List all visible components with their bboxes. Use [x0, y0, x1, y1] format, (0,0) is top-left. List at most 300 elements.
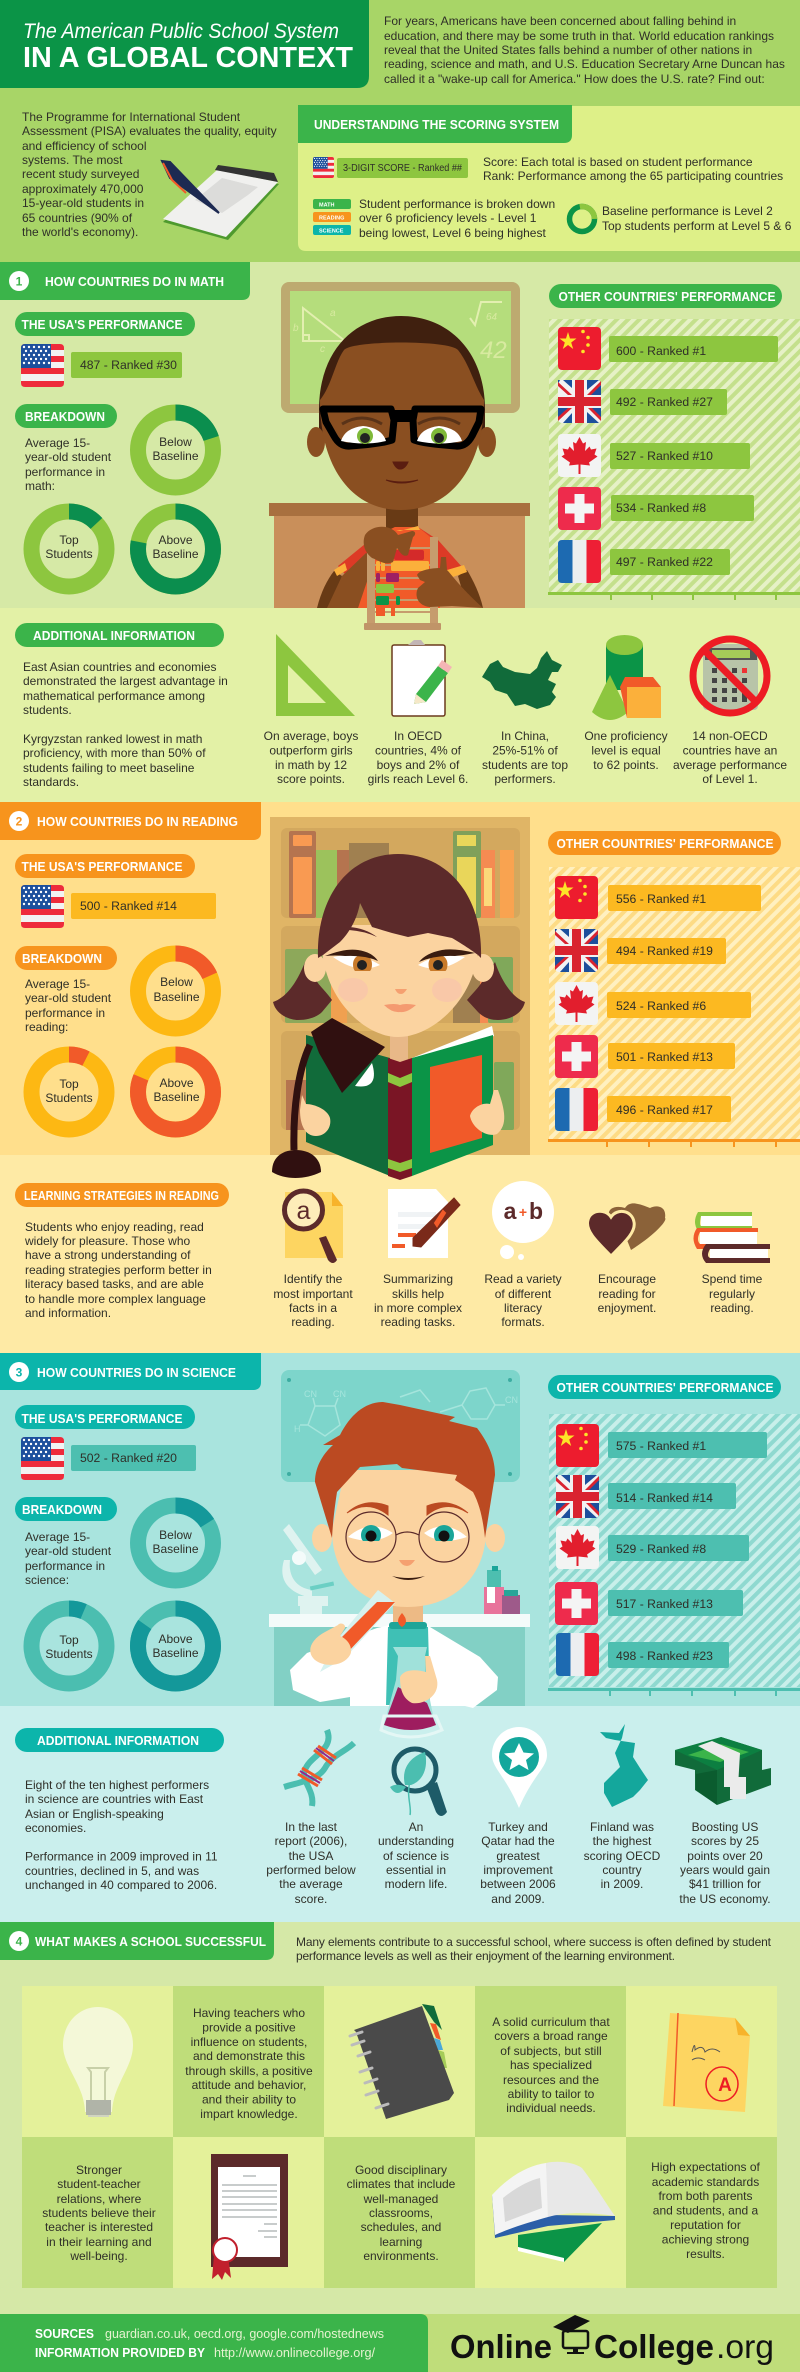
- icon: notepad and pen: [162, 161, 279, 240]
- caption: OECD: girls reach Level 6.: [368, 772, 468, 786]
- math captions: [264, 729, 787, 786]
- caption: OECD: In OECD: [394, 729, 442, 743]
- heading tab: how countries do in science: HOW COUNTRIES DO IN SCIENCE: [37, 1365, 236, 1380]
- illustration: girl reading: [272, 854, 525, 1180]
- text: discipline: schedules, and: [361, 2220, 441, 2234]
- donut: below baseline: Below: [160, 975, 193, 989]
- text: discipline: learning: [380, 2235, 422, 2249]
- book: [306, 1026, 494, 1180]
- caption: China: students are top: [482, 758, 568, 772]
- caption: 2006 report: the USA: [289, 1849, 333, 1863]
- caption: Turkey and Qatar: and 2009.: [491, 1892, 545, 1906]
- text: teachers: and their ability to: [202, 2092, 296, 2106]
- math additional text: standards.: [23, 775, 79, 789]
- subject colour key: SCIENCE: [319, 228, 344, 234]
- pill: other countries' performance: [548, 1375, 781, 1399]
- caption: boosting scores: the US economy.: [679, 1892, 771, 1906]
- science additional text: countries, declined in 5, and was: [25, 1864, 199, 1878]
- pill: breakdown: BREAKDOWN: [25, 409, 105, 424]
- caption: enjoyment: Encourage: [598, 1272, 656, 1286]
- donut: below baseline: Baseline: [152, 1542, 199, 1556]
- panel: science additional background: [0, 1706, 800, 1922]
- pill: learning strategies: [15, 1183, 229, 1207]
- science captions: [266, 1820, 771, 1906]
- caption: identify facts: reading.: [291, 1315, 335, 1329]
- caption: summarizing: Summarizing: [383, 1272, 453, 1286]
- illustration: science board: H: [294, 1424, 300, 1434]
- pill: other countries' performance: OTHER COUNTRIES' PERFORMANCE: [558, 289, 776, 304]
- icon: monitor with mortarboard: [553, 2315, 590, 2354]
- science additional text: in science are countries with East: [25, 1792, 204, 1806]
- PISA description: recent study surveyed: [22, 167, 139, 181]
- donut: below baseline: [138, 1506, 213, 1580]
- caption: variety: Read a variety: [484, 1272, 562, 1286]
- UK row: 494 - Ranked #19: [616, 944, 713, 958]
- text: expectations: achieving strong: [662, 2232, 749, 2246]
- illustration: science board: [281, 1370, 520, 1482]
- USA score bar: 500 - Ranked #14: [80, 899, 177, 913]
- math additional text: Kyrgyzstan ranked lowest in math: [23, 732, 202, 746]
- pill: breakdown: BREAKDOWN: [22, 1502, 102, 1517]
- text: teachers: impart knowledge.: [200, 2107, 298, 2121]
- PISA description: and efficiency of school: [22, 139, 147, 153]
- illustration: chalkboard: 42: [480, 337, 507, 364]
- caption: understanding science: understanding: [378, 1834, 454, 1848]
- reading strategies text: to handle more complex language: [25, 1292, 206, 1306]
- caption: boosting scores: Boosting US: [692, 1820, 758, 1834]
- China row: [555, 876, 761, 919]
- text: expectations: results.: [686, 2247, 725, 2261]
- heading tab: what makes a school successful: 4: [16, 1934, 23, 1948]
- caption: non-OECD: 14 non-OECD: [692, 729, 768, 743]
- France row: 498 - Ranked #23: [616, 1649, 713, 1663]
- strategy captions: [273, 1272, 763, 1329]
- icon: a plus b thought bubble: +: [519, 1204, 527, 1220]
- caption: summarizing: skills help: [392, 1287, 444, 1301]
- donut: below baseline: [138, 954, 213, 1028]
- breakdown text: performance in: [25, 1006, 105, 1020]
- title line 1: The American Public School System: [23, 20, 339, 43]
- text: expectations: reputation for: [670, 2218, 741, 2232]
- sources line: SOURCES: [35, 2326, 94, 2341]
- sources line: guardian.co.uk, oecd.org, google.com/hostednews: [105, 2326, 384, 2341]
- icon: clipboard and pencil: [392, 640, 452, 716]
- USA score bar: [71, 1445, 196, 1471]
- caption: identify facts: most important: [273, 1287, 353, 1301]
- text: discipline: climates that include: [347, 2177, 456, 2191]
- donut: above baseline: Baseline: [152, 547, 199, 561]
- flag: USA: [21, 344, 64, 387]
- heading tab: what makes a school successful: WHAT MAKES A SCHOOL SUCCESSFUL: [35, 1934, 266, 1949]
- flag: USA: [21, 1437, 64, 1480]
- heading tab: how countries do in reading: HOW COUNTRIES DO IN READING: [37, 814, 238, 829]
- UK row: 492 - Ranked #27: [616, 395, 713, 409]
- panel: section 3 science: [0, 1353, 800, 1706]
- test tube: [310, 1590, 406, 1672]
- donut: above baseline: Above: [159, 1076, 194, 1090]
- heading tab: how countries do in science: [0, 1353, 261, 1390]
- caption: boosting scores: $41 trillion for: [689, 1877, 761, 1891]
- caption: Turkey and Qatar: improvement: [483, 1863, 553, 1877]
- pill: the USA's performance: [15, 312, 195, 336]
- pill: breakdown: BREAKDOWN: [22, 951, 102, 966]
- icon: light bulb: [63, 2007, 133, 2117]
- caption: enjoyment: reading for: [598, 1287, 656, 1301]
- caption: summarizing: reading tasks.: [381, 1315, 455, 1329]
- China row: [556, 1424, 767, 1467]
- text: curriculum: of subjects, but still: [500, 2044, 602, 2058]
- Canada row: [556, 1526, 749, 1569]
- pill: other countries' performance: OTHER COUNTRIES' PERFORMANCE: [556, 1380, 774, 1395]
- panel: footer logo background: [420, 2314, 800, 2372]
- panel: other countries bar chart: [548, 319, 800, 600]
- caption: OECD: countries, 4% of: [375, 744, 462, 758]
- PISA description: 15-year-old students in: [22, 196, 144, 210]
- logo: OnlineCollege.org: Online: [450, 2328, 552, 2365]
- text: discipline: classrooms,: [369, 2206, 433, 2220]
- information provided by line: http://www.onlinecollege.org/: [214, 2345, 375, 2360]
- donut: top students: [32, 1054, 106, 1130]
- subject colour key: READING: [319, 216, 344, 222]
- text: curriculum: individual needs.: [506, 2101, 596, 2115]
- UK row: [555, 929, 726, 972]
- breakdown text: Average 15-: [25, 1530, 90, 1544]
- caption: understanding science: of science is: [383, 1849, 449, 1863]
- Switzerland row: [558, 487, 754, 530]
- section 4 intro: Many elements contribute to a successful school, where success is often defined by student: [296, 1935, 772, 1949]
- text: relations: student-teacher: [57, 2177, 141, 2191]
- pill: breakdown: [15, 1497, 117, 1521]
- caption: Finland: the highest: [593, 1834, 652, 1848]
- donut: above baseline: Baseline: [153, 1090, 200, 1104]
- caption: Finland: in 2009.: [601, 1877, 643, 1891]
- PISA description: the world's economy).: [22, 225, 138, 239]
- caption: understanding science: modern life.: [385, 1877, 447, 1891]
- donut: below baseline: Below: [159, 435, 192, 449]
- donut: top students: [32, 512, 106, 586]
- donut key: [568, 205, 596, 233]
- panel: understanding the scoring system: [298, 105, 800, 251]
- heading tab: how countries do in reading: [0, 802, 261, 840]
- breakdown text: Average 15-: [25, 977, 90, 991]
- Switzerland row: 517 - Ranked #13: [616, 1597, 713, 1611]
- China row: [558, 327, 778, 370]
- illustration: chalkboard: c: [320, 344, 325, 355]
- Canada row: 527 - Ranked #10: [616, 449, 713, 463]
- icon: graded A+ paper: A: [718, 2075, 732, 2096]
- caption: variety: formats.: [501, 1315, 545, 1329]
- panel: other countries bar chart: [548, 1414, 800, 1696]
- text: teachers: attitude and behavior,: [192, 2078, 306, 2092]
- icon: crossed-out calculator: [693, 639, 767, 713]
- donut: top students: Students: [45, 1091, 93, 1105]
- science additional text: unchanged in 40 compared to 2006.: [25, 1878, 217, 1892]
- illustration: science board: CN: [304, 1389, 317, 1399]
- icon: DNA helix: [284, 1730, 354, 1806]
- icon: magnifier on paper: a: [297, 1197, 311, 1225]
- caption: OECD: boys and 2% of: [377, 758, 460, 772]
- pill: the USA's performance: [15, 1405, 195, 1429]
- small US flag: [313, 157, 334, 178]
- scoring heading tab: [298, 105, 572, 143]
- text: relations: teacher is interested: [45, 2220, 153, 2234]
- pill: the USA's performance: THE USA'S PERFORMANCE: [22, 317, 183, 332]
- pill: additional information: [15, 1728, 224, 1752]
- text: teachers: through skills, a positive: [185, 2064, 313, 2078]
- text: curriculum: A solid curriculum that: [492, 2015, 610, 2029]
- icon: open book on closed book: [492, 2162, 615, 2262]
- text: teachers: provide a positive: [202, 2020, 296, 2034]
- breakdown text: math:: [25, 479, 55, 493]
- intro text: reveal that the United States falls behind a number of other nations in: [384, 43, 752, 57]
- pill: the USA's performance: THE USA'S PERFORMANCE: [22, 859, 183, 874]
- intro text: reading, science and math, and U.S. Education Secretary Arne Duncan has: [384, 57, 785, 71]
- icon: magnifier on paper: [284, 1191, 343, 1263]
- score legend bar: 3-DIGIT SCORE - Ranked ##: [343, 163, 462, 174]
- intro text: For years, Americans have been concerned about falling behind in: [384, 14, 736, 28]
- reading strategies text: widely for pleasure. Those who: [24, 1234, 191, 1248]
- pill: additional information: [15, 623, 224, 647]
- proficiency explanation: being lowest, Level 6 being highest: [359, 226, 546, 240]
- icon: China map: [482, 651, 562, 709]
- panel: section 4 what makes a school successful: [0, 1922, 800, 2372]
- caption: summarizing: in more complex: [374, 1301, 462, 1315]
- icon: set square: [276, 634, 355, 716]
- caption: Finland: scoring OECD: [584, 1849, 661, 1863]
- math additional text: proficiency, with more than 50% of: [23, 746, 206, 760]
- heading tab: how countries do in math: 1: [16, 274, 23, 288]
- donut: below baseline: [138, 412, 213, 488]
- donut: above baseline: Above: [158, 1632, 193, 1646]
- caption: Turkey and Qatar: Qatar had the: [481, 1834, 555, 1848]
- proficiency explanation: Student performance is broken down: [359, 197, 555, 211]
- math additional text: mathematical performance among: [23, 689, 205, 703]
- text: expectations: from both parents: [658, 2189, 753, 2203]
- caption: proficiency: to 62 points.: [593, 758, 659, 772]
- Switzerland row: 534 - Ranked #8: [616, 501, 706, 515]
- text: relations: relations, where: [57, 2192, 142, 2206]
- icon: framed certificate: [211, 2154, 288, 2280]
- USA score bar: [71, 893, 216, 919]
- Switzerland row: [555, 1582, 743, 1625]
- caption: boys outperform: score points.: [277, 772, 345, 786]
- scoring heading text: UNDERSTANDING THE SCORING SYSTEM: [314, 117, 559, 132]
- math additional text: students failing to meet baseline: [23, 761, 195, 775]
- France row: 496 - Ranked #17: [616, 1103, 713, 1117]
- text: curriculum: resources and the: [503, 2073, 599, 2087]
- flag: USA: [21, 885, 64, 928]
- heading tab: how countries do in science: 3: [16, 1366, 23, 1380]
- icon: location pin with star: [492, 1727, 547, 1808]
- donut: above baseline: [138, 512, 213, 586]
- illustration: desk with microscope and bottles: [269, 1524, 530, 1706]
- donut: top students: Top: [59, 1077, 79, 1091]
- icon: magnifier and leaf: [390, 1749, 447, 1816]
- caption: understanding science: essential in: [386, 1863, 446, 1877]
- France row: 497 - Ranked #22: [616, 555, 713, 569]
- text: relations: well-being.: [69, 2249, 128, 2263]
- caption: 2006 report: performed below: [266, 1863, 356, 1877]
- pill: learning strategies: LEARNING STRATEGIES IN READING: [24, 1188, 219, 1203]
- text: relations: students believe their: [42, 2206, 156, 2220]
- PISA description: Assessment (PISA) evaluates the quality, equity: [22, 124, 277, 138]
- icon: graded A+ paper: [663, 2013, 750, 2112]
- pill: other countries' performance: [549, 284, 782, 308]
- reading strategies text: reading strategies perform better in: [25, 1263, 212, 1277]
- icon: Finland map: [600, 1724, 648, 1807]
- reading strategies text: and information.: [25, 1306, 111, 1320]
- math additional text: students.: [23, 703, 72, 717]
- UK row: 514 - Ranked #14: [616, 1491, 713, 1505]
- text: relations: Stronger: [76, 2163, 122, 2177]
- PISA description: 65 countries (90% of: [22, 211, 133, 225]
- UK row: [558, 380, 727, 423]
- caption: Finland: country: [602, 1863, 642, 1877]
- caption: Finland: Finland was: [590, 1820, 654, 1834]
- UK row: [556, 1475, 736, 1518]
- breakdown text: reading:: [25, 1020, 68, 1034]
- score legend bar: [337, 158, 468, 178]
- panel: page header background: [0, 0, 800, 263]
- subject colour key: MATH: [319, 202, 335, 208]
- China row: 600 - Ranked #1: [616, 344, 706, 358]
- icon: a plus b thought bubble: [492, 1181, 554, 1260]
- icon: a plus b thought bubble: b: [529, 1198, 543, 1224]
- caption: China: 25%-51% of: [492, 744, 558, 758]
- caption: 2006 report: report (2006),: [275, 1834, 347, 1848]
- intro text: called it a "wake-up call for America." How does the U.S. rate? Find out:: [384, 72, 765, 86]
- caption: boosting scores: points over 20: [687, 1849, 763, 1863]
- caption: proficiency: level is equal: [591, 744, 661, 758]
- icon: two hearts: [587, 1203, 665, 1256]
- caption: identify facts: facts in a: [289, 1301, 337, 1315]
- science additional text: Performance in 2009 improved in 11: [25, 1850, 218, 1864]
- text: curriculum: ability to tailor to: [508, 2087, 595, 2101]
- panel: section 1 math: [0, 262, 800, 608]
- hands: [364, 527, 415, 563]
- desk lamp: [272, 1018, 385, 1178]
- reading strategies text: have a strong understanding of: [25, 1248, 191, 1262]
- text: teachers: and demonstrate this: [193, 2049, 305, 2063]
- text: curriculum: has specialized: [510, 2058, 592, 2072]
- title block: [0, 0, 369, 88]
- text: discipline: Good disciplinary: [355, 2163, 447, 2177]
- donut: below baseline: Baseline: [152, 449, 199, 463]
- illustration: desk: [269, 503, 530, 608]
- USA score bar: 502 - Ranked #20: [80, 1451, 177, 1465]
- donut: top students: [32, 1608, 106, 1684]
- icon: stacks of money: [675, 1737, 771, 1805]
- caption: Turkey and Qatar: greatest: [496, 1849, 540, 1863]
- icon: stack of books: [694, 1212, 770, 1263]
- panel: section 2 reading: [0, 802, 800, 1155]
- caption: 2006 report: score.: [295, 1892, 327, 1906]
- Canada row: [555, 982, 751, 1025]
- pill: additional information: ADDITIONAL INFORMATION: [33, 628, 195, 643]
- icon: page and marker: [388, 1189, 460, 1258]
- caption: Turkey and Qatar: between 2006: [480, 1877, 556, 1891]
- text: discipline: environments.: [363, 2249, 439, 2263]
- pill: other countries' performance: OTHER COUNTRIES' PERFORMANCE: [556, 836, 774, 851]
- math additional text: East Asian countries and economies: [23, 660, 216, 674]
- caption: boys outperform: On average, boys: [264, 729, 358, 743]
- caption: variety: of different: [495, 1287, 552, 1301]
- reading strategies text: literacy based tasks, and are able: [25, 1277, 204, 1291]
- caption: boosting scores: scores by 25: [691, 1834, 759, 1848]
- score explanation: Score: Each total is based on student performance: [483, 155, 753, 169]
- text: teachers: Having teachers who: [193, 2006, 305, 2020]
- caption: understanding science: An: [409, 1820, 423, 1834]
- USA score bar: [71, 352, 182, 378]
- breakdown text: science:: [25, 1573, 69, 1587]
- donut: above baseline: [138, 1608, 213, 1684]
- France row: [558, 540, 730, 583]
- donut: top students: Top: [59, 1633, 79, 1647]
- score explanation: Rank: Performance among the 65 participating countries: [483, 169, 783, 183]
- PISA description: The Programme for International Student: [22, 110, 241, 124]
- breakdown text: performance in: [25, 1559, 105, 1573]
- icon: spiral notebook: [350, 2004, 454, 2119]
- caption: regular reading: reading.: [710, 1301, 754, 1315]
- breakdown text: year-old student: [25, 991, 112, 1005]
- math additional text: demonstrated the largest advantage in: [23, 674, 228, 688]
- panel: reading strategies background: [0, 1155, 800, 1353]
- text: relations: in their learning and: [46, 2235, 152, 2249]
- USA score bar: 487 - Ranked #30: [80, 358, 177, 372]
- illustration: chalkboard: [281, 282, 520, 413]
- pill: additional information: ADDITIONAL INFORMATION: [37, 1733, 199, 1748]
- baseline explanation: Top students perform at Level 5 & 6: [602, 219, 792, 233]
- Canada row: 524 - Ranked #6: [616, 999, 706, 1013]
- baseline explanation: Baseline performance is Level 2: [602, 204, 773, 218]
- illustration: bookshelf: [270, 817, 530, 1155]
- illustration: science board: CN: [333, 1389, 346, 1399]
- heading tab: how countries do in math: [0, 262, 250, 300]
- text: curriculum: covers a broad range: [494, 2029, 608, 2043]
- donut: below baseline: Below: [159, 1528, 192, 1542]
- Canada row: 529 - Ranked #8: [616, 1542, 706, 1556]
- logo: OnlineCollege.org: [450, 2315, 774, 2365]
- reading strategies text: Students who enjoy reading, read: [25, 1220, 204, 1234]
- abacus: [364, 537, 441, 630]
- caption: identify facts: Identify the: [284, 1272, 343, 1286]
- section 4 intro: performance levels as well as their enjoyment of the learning environment.: [296, 1949, 675, 1963]
- text: expectations: academic standards: [652, 2175, 759, 2189]
- pill: other countries' performance: [548, 831, 781, 855]
- caption: regular reading: regularly: [709, 1287, 755, 1301]
- science additional text: economies.: [25, 1821, 86, 1835]
- PISA description: approximately 470,000: [22, 182, 144, 196]
- science additional text: Asian or English-speaking: [25, 1807, 164, 1821]
- pill: the USA's performance: [15, 854, 195, 878]
- caption: boys outperform: in math by 12: [275, 758, 347, 772]
- breakdown text: year-old student: [25, 1544, 112, 1558]
- illustration: chalkboard: a: [330, 308, 336, 319]
- China row: 575 - Ranked #1: [616, 1439, 706, 1453]
- breakdown text: year-old student: [25, 450, 112, 464]
- panel: sources: [0, 2314, 428, 2372]
- Switzerland row: [555, 1035, 735, 1078]
- caption: 2006 report: In the last: [285, 1820, 338, 1834]
- proficiency explanation: over 6 proficiency levels - Level 1: [359, 211, 537, 225]
- information provided by line: [35, 2345, 375, 2360]
- text: expectations: and students, and a: [653, 2204, 759, 2218]
- caption: 2006 report: the average: [279, 1877, 343, 1891]
- caption: non-OECD: average performance: [673, 758, 787, 772]
- icon: a plus b thought bubble: a: [504, 1198, 517, 1224]
- donut: above baseline: [138, 1054, 213, 1130]
- PISA description: systems. The most: [22, 153, 123, 167]
